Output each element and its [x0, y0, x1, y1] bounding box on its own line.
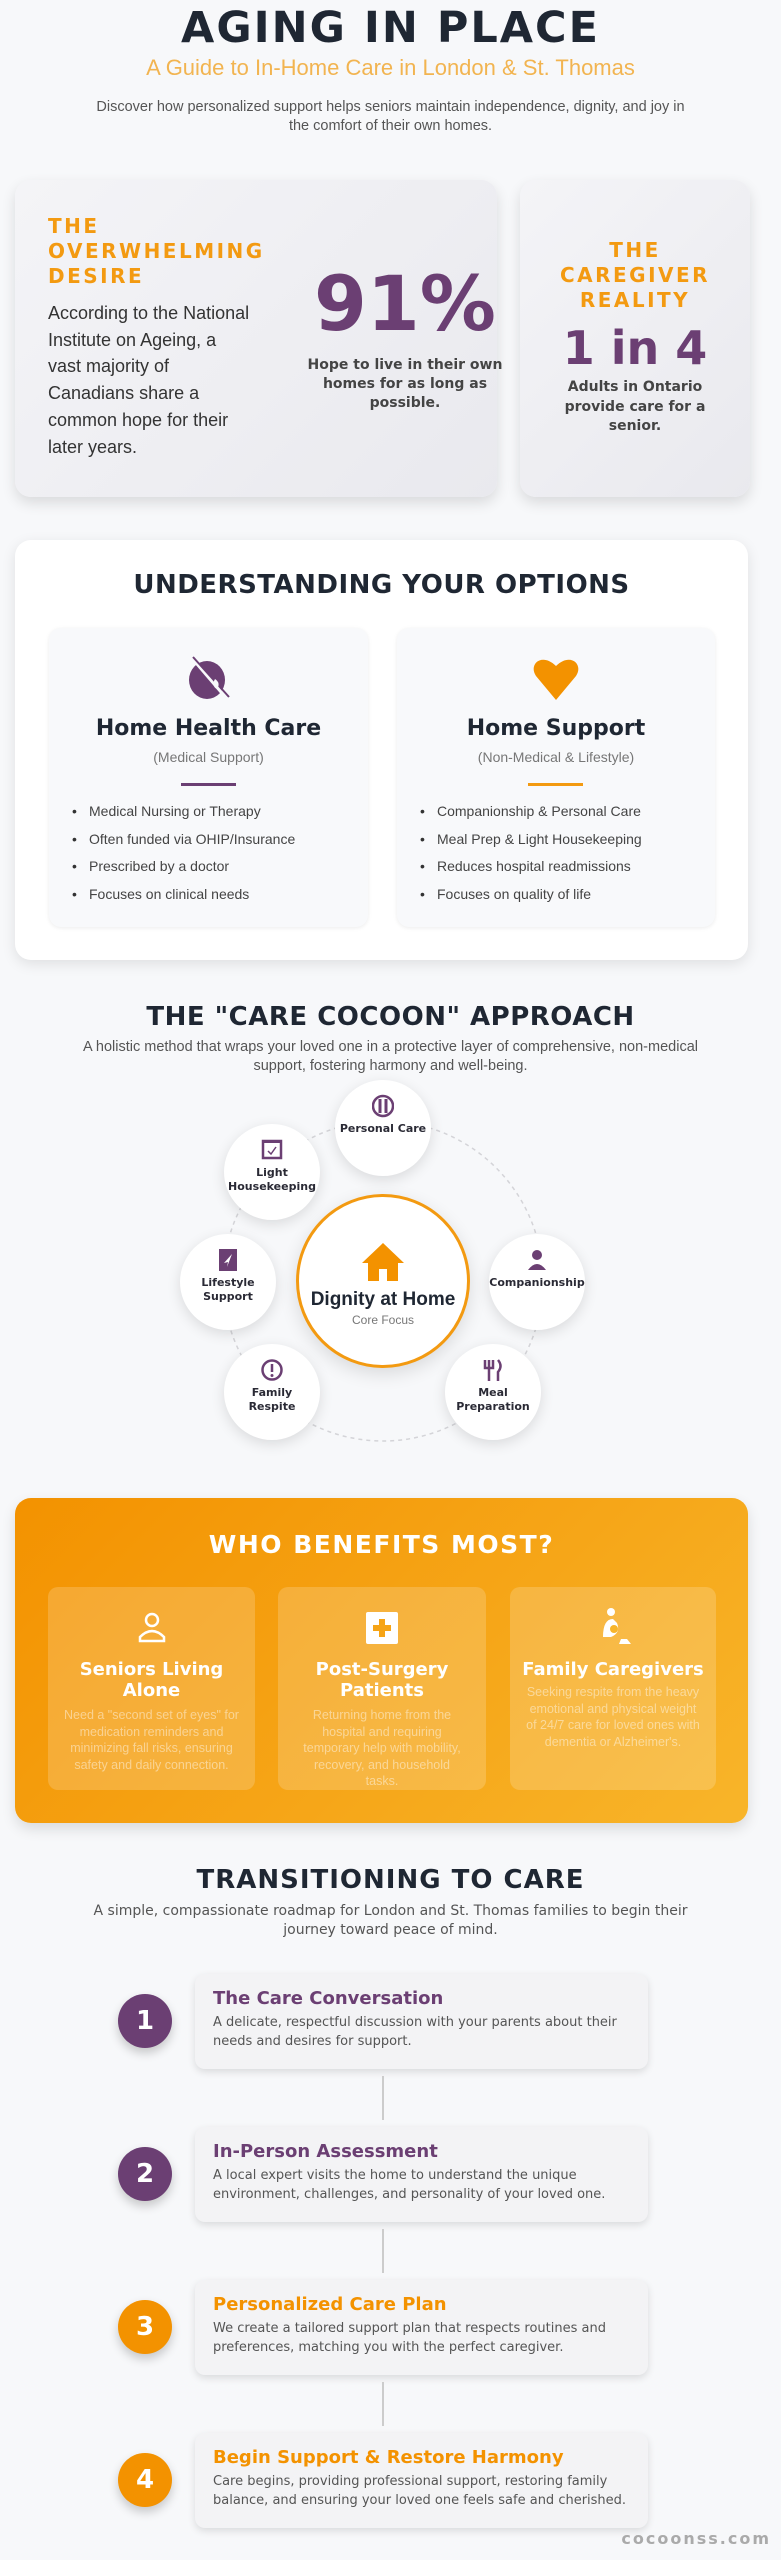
node: family respite: Family	[252, 1386, 292, 1399]
node: personal care	[335, 1080, 431, 1176]
heading: care cocoon: THE "CARE COCOON" APPROACH	[146, 1002, 635, 1032]
node: companionship: Companionship	[489, 1276, 585, 1289]
heading: caregiver reality	[560, 238, 710, 312]
step 4: Begin Support & Restore Harmony	[213, 2447, 564, 2468]
card: home health care	[49, 628, 368, 927]
diagram: care cocoon	[176, 1092, 588, 1448]
step 1	[114, 1981, 650, 2074]
subtitle: A Guide to In-Home Care in London & St. Thomas	[146, 55, 635, 80]
subtitle: (Medical Support)	[153, 749, 264, 765]
step 4: 4	[136, 2465, 154, 2495]
heading: caregiver reality: CAREGIVER	[560, 263, 710, 287]
node: meal preparation: Preparation	[456, 1400, 530, 1413]
bullet list: Reduces hospital readmissions	[437, 858, 631, 874]
step 1: A delicate, respectful discussion with your parents about their needs and desires for support.	[213, 2015, 617, 2049]
panel: understanding your options	[15, 540, 748, 960]
stat caption: Adults in Ontario provide care for a senior.	[565, 379, 705, 434]
card: family caregivers: Family Caregivers	[522, 1659, 704, 1680]
card: seniors living alone	[48, 1587, 255, 1790]
stat caption: Hope to live in their own homes for as long as possible.	[308, 357, 502, 411]
bullet list	[72, 803, 295, 902]
title: Home Support	[467, 716, 645, 741]
big stat 91%: 91%	[314, 259, 496, 348]
title: Home Health Care	[96, 716, 321, 741]
panel: who benefits most	[15, 1498, 748, 1823]
node: companionship	[489, 1234, 585, 1330]
step 2: In-Person Assessment	[213, 2141, 438, 2162]
icon: medical	[189, 656, 230, 699]
bullet list	[420, 803, 642, 902]
card: post-surgery patients: Returning home from the hospital and requiring temporary help with mobility, recovery, and household tasks.	[303, 1708, 461, 1788]
card: post-surgery patients	[278, 1587, 486, 1790]
node: light housekeeping: Housekeeping	[228, 1180, 316, 1193]
heading: overwhelming desire: OVERWHELMING	[48, 239, 265, 263]
step 4: Care begins, providing professional support, restoring family balance, and ensuring your loved one feels safe and cherished.	[213, 2474, 626, 2508]
heading: caregiver reality: THE	[609, 238, 661, 262]
card: post-surgery patients: Post-Surgery	[316, 1659, 448, 1680]
cocoon description: A holistic method that wraps your loved one in a protective layer of comprehensive, non-medical support, fostering harmony and well-being.	[83, 1039, 698, 1074]
step 4	[114, 2440, 650, 2533]
step 1: The Care Conversation	[213, 1988, 443, 2009]
node: personal care: Personal Care	[340, 1122, 426, 1135]
center: dignity at home: Dignity at Home	[311, 1289, 455, 1310]
icon: heart	[534, 660, 578, 700]
bullet list: Prescribed by a doctor	[89, 858, 229, 874]
node: family respite: Respite	[249, 1400, 295, 1413]
subtitle: (Non-Medical & Lifestyle)	[478, 749, 634, 765]
heading: overwhelming desire	[48, 214, 265, 288]
heading: WHO BENEFITS MOST?	[209, 1530, 554, 1559]
step 2: 2	[136, 2159, 154, 2189]
step 3: 3	[136, 2312, 154, 2342]
heading: caregiver reality: REALITY	[580, 288, 690, 312]
step 2: A local expert visits the home to understand the unique environment, challenges, and personality of your loved one.	[213, 2168, 605, 2202]
bullet list: Meal Prep & Light Housekeeping	[437, 830, 642, 846]
heading: UNDERSTANDING YOUR OPTIONS	[133, 570, 630, 600]
transition description: A simple, compassionate roadmap for London and St. Thomas families to begin their journey toward peace of mind.	[94, 1903, 687, 1938]
card: seniors living alone: Seniors Living	[80, 1659, 223, 1680]
node: light housekeeping: Light	[256, 1166, 288, 1179]
bullet list: Focuses on quality of life	[437, 886, 591, 902]
heading: transitioning to care: TRANSITIONING TO CARE	[196, 1865, 584, 1895]
bullet list: Medical Nursing or Therapy	[89, 803, 261, 819]
step 3: Personalized Care Plan	[213, 2294, 447, 2315]
body text: According to the National Institute on Ageing, a vast majority of Canadians share a common hope for their later years.	[48, 303, 249, 457]
node: lifestyle support: Lifestyle	[201, 1276, 255, 1289]
step 1: 1	[136, 2006, 154, 2036]
node: meal preparation: Meal	[478, 1386, 508, 1399]
bullet list: Companionship & Personal Care	[437, 803, 641, 819]
step 3: We create a tailored support plan that respects routines and preferences, matching you with the perfect caregiver.	[213, 2321, 606, 2355]
step 3	[114, 2287, 650, 2380]
node: lifestyle support	[180, 1234, 276, 1330]
intro text: Discover how personalized support helps seniors maintain independence, dignity, and joy in the comfort of their own homes.	[96, 99, 685, 134]
node: meal preparation	[445, 1344, 541, 1440]
heading: overwhelming desire: DESIRE	[48, 264, 144, 288]
center: dignity at home	[296, 1194, 470, 1368]
card: post-surgery patients: Patients	[340, 1680, 424, 1701]
card: seniors living alone: Need a "second set of eyes" for medication reminders and minimizing fall risks, ensuring safety and daily connection.	[64, 1708, 239, 1772]
bullet list: Often funded via OHIP/Insurance	[89, 830, 295, 846]
panel: overwhelming desire stat	[15, 180, 497, 497]
node: family respite	[224, 1344, 320, 1440]
card: family caregivers	[510, 1587, 716, 1790]
card: seniors living alone: Alone	[123, 1680, 180, 1701]
node: light housekeeping	[224, 1124, 320, 1220]
card: home support	[397, 628, 715, 927]
node: lifestyle support: Support	[203, 1290, 253, 1303]
footer: site name: cocoonss.com	[621, 2529, 771, 2548]
center: dignity at home: Core Focus	[352, 1313, 414, 1327]
panel: caregiver reality stat	[520, 180, 750, 497]
heading: overwhelming desire: THE	[48, 214, 100, 238]
stat 1 in 4: 1 in 4	[563, 321, 707, 375]
title: AGING IN PLACE	[181, 3, 600, 53]
card: family caregivers: Seeking respite from the heavy emotional and physical weight of 24/7 care for loved ones with dementia or Alzheimer's.	[526, 1685, 700, 1748]
bullet list: Focuses on clinical needs	[89, 886, 249, 902]
step 2	[114, 2134, 650, 2227]
